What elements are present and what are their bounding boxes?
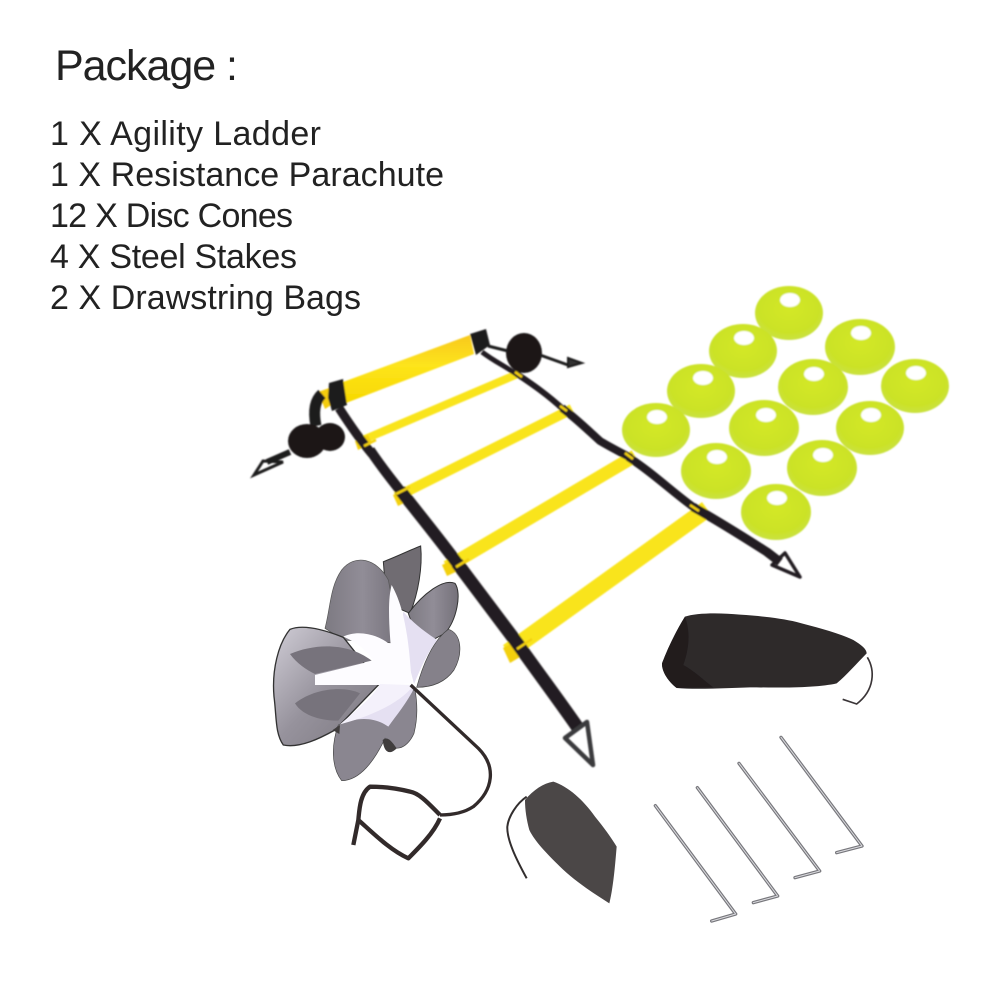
- title: Package :: [55, 42, 238, 90]
- canopy back lobe: [383, 546, 421, 613]
- strap hook to left pouch: [315, 394, 322, 426]
- item: drawstring bags: 2 X Drawstring Bags: [50, 279, 361, 317]
- cone 10: [681, 443, 751, 499]
- strap clips: [364, 372, 699, 649]
- stake 4: [781, 737, 862, 853]
- rung end tabs: [355, 435, 530, 663]
- canopy dark notch: [333, 725, 397, 752]
- large bag cord: [843, 657, 872, 704]
- cone 3: [825, 319, 895, 375]
- item: resistance parachute: 1 X Resistance Parachute: [50, 156, 444, 194]
- cone 1: [755, 286, 823, 340]
- item: steel stakes: 4 X Steel Stakes: [50, 238, 297, 276]
- bag shaded end: [662, 617, 713, 688]
- cone 6: [881, 359, 949, 413]
- cone 8: [729, 400, 799, 456]
- canopy right lobe: [408, 582, 458, 647]
- towing cord and harness: [353, 685, 490, 858]
- ladder rungs: [358, 373, 707, 652]
- ladder straps: [339, 352, 780, 728]
- item: agility ladder: 1 X Agility Ladder: [50, 115, 321, 153]
- stake 2: [697, 788, 778, 903]
- cone 9: [836, 401, 904, 455]
- cone 11: [787, 440, 857, 496]
- lavender panels: [338, 612, 437, 727]
- bottom triangle handle: [565, 722, 593, 765]
- white panels: [315, 585, 412, 685]
- right rolled pouch: [488, 333, 582, 373]
- disc cones: [622, 286, 949, 540]
- cone 5: [778, 359, 848, 415]
- cone 7: [622, 403, 690, 457]
- right triangle handle: [772, 553, 800, 577]
- agility ladder: [254, 329, 800, 765]
- left rolled pouch: [254, 423, 345, 475]
- large drawstring bag: [662, 613, 872, 704]
- stake 1: [655, 806, 736, 921]
- small drawstring bag: [507, 782, 617, 903]
- cone 2: [709, 324, 777, 378]
- canopy top lobe: [325, 560, 400, 643]
- stake 3: [739, 763, 820, 878]
- folded top rungs: [343, 335, 474, 403]
- canopy bottom lobe: [333, 689, 417, 781]
- small bag cord: [507, 797, 527, 878]
- resistance parachute: [274, 546, 490, 858]
- cone 12: [741, 484, 811, 540]
- cone 4: [667, 364, 735, 418]
- steel stakes: [655, 737, 862, 921]
- item: disc cones: 12 X Disc Cones: [50, 197, 293, 235]
- canopy lower right lobe: [417, 629, 460, 687]
- top rung bands: [328, 379, 347, 411]
- package contents list: [50, 115, 444, 317]
- canopy darker folds: [290, 646, 372, 721]
- canopy left lobe: [274, 627, 380, 746]
